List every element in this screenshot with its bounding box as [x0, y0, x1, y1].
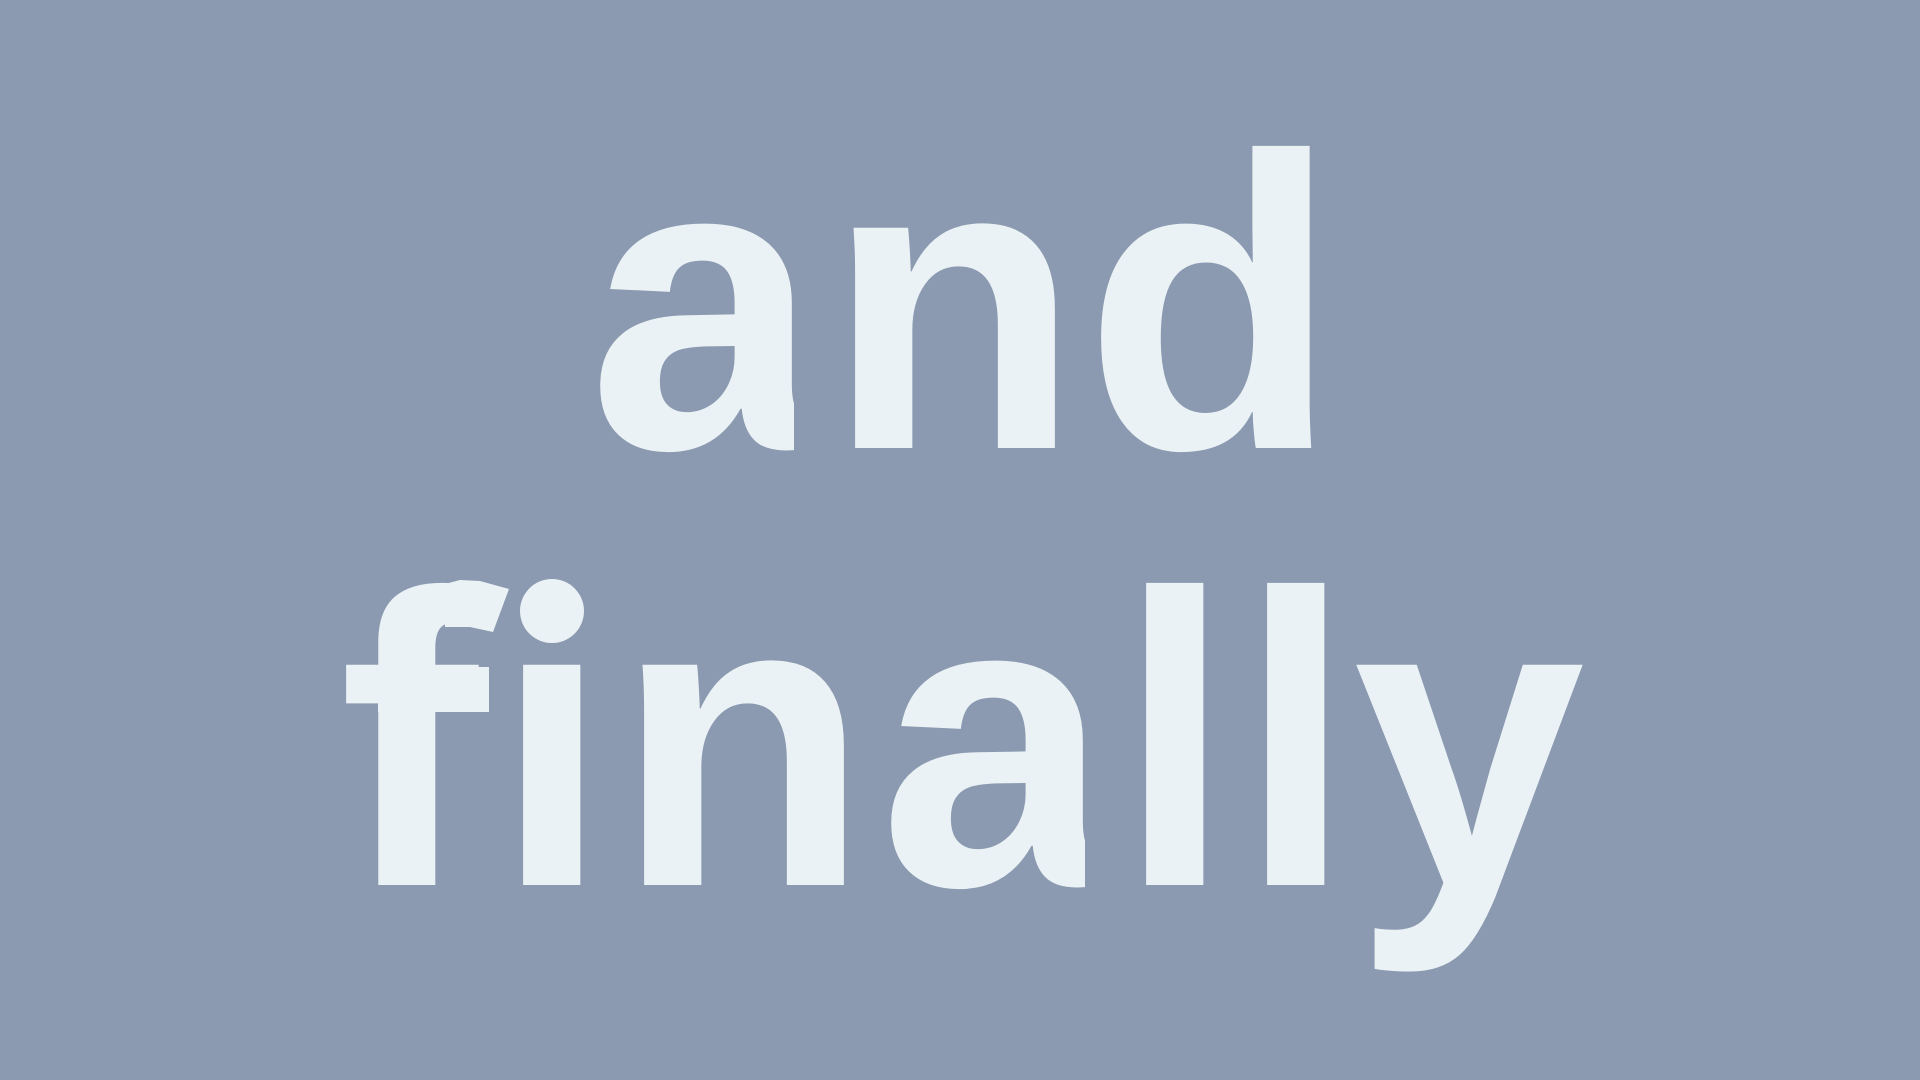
title line 2: finally: finally	[339, 509, 1588, 976]
title line 1: and: and	[588, 72, 1339, 537]
